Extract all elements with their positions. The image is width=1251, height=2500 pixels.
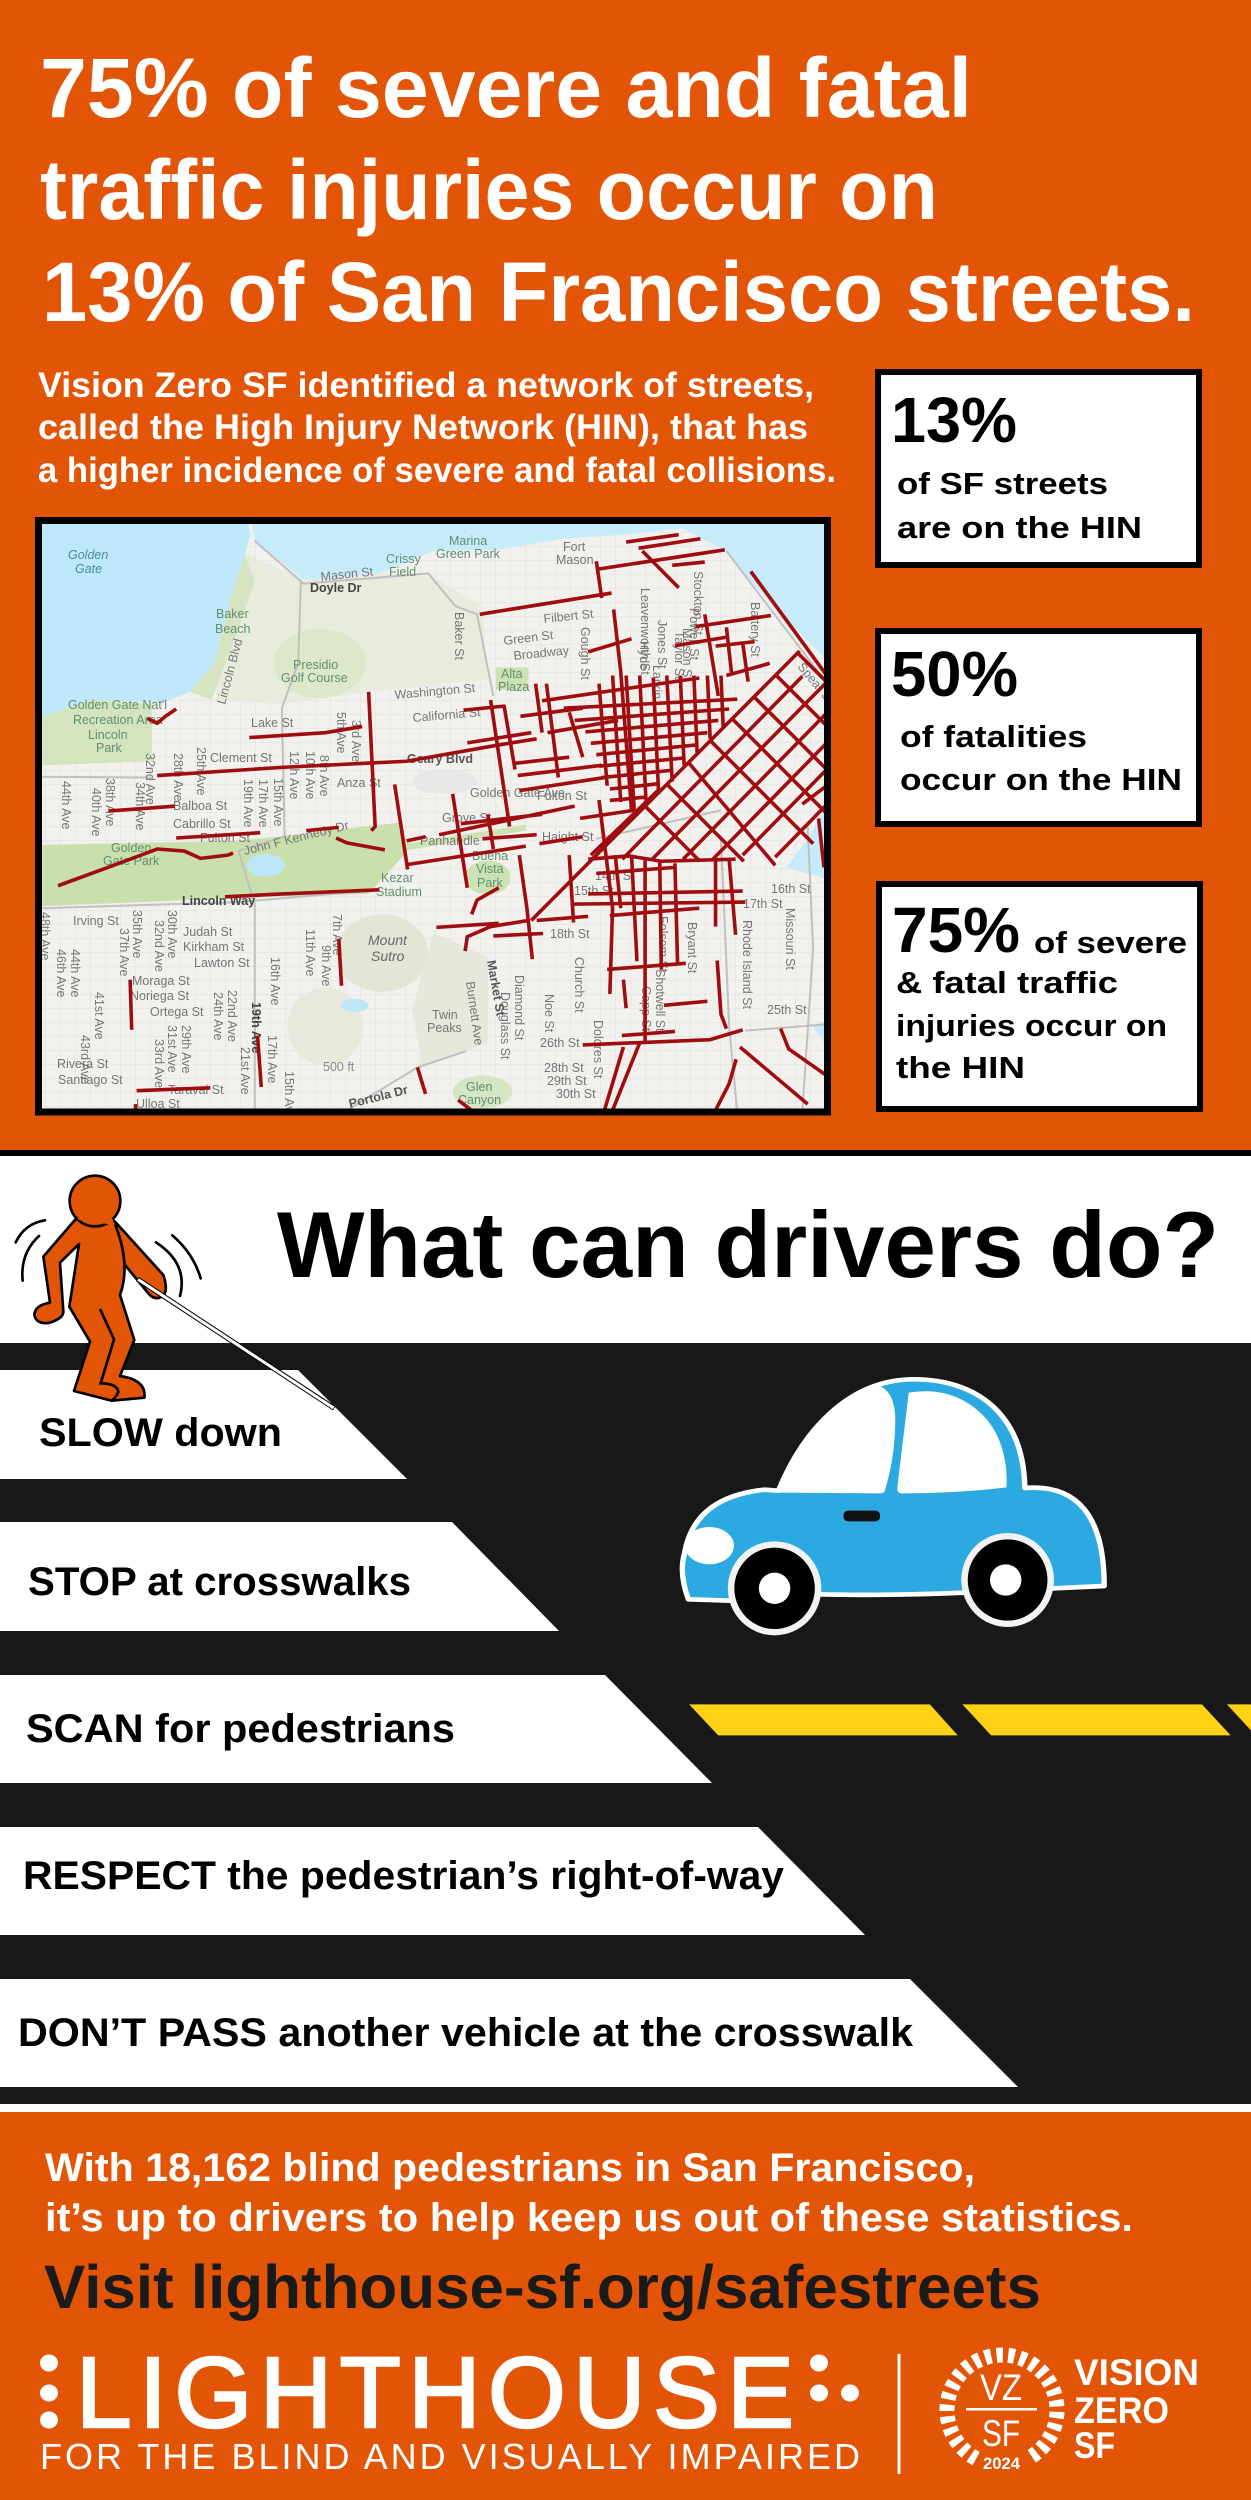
map street labels: 29th Ave	[179, 1025, 193, 1073]
map street labels: Stadium	[376, 885, 422, 899]
stat box: 75%: injuries occur on	[896, 1008, 1167, 1043]
map street labels: 15th Ave	[282, 1071, 296, 1119]
closing statement	[45, 2146, 1133, 2240]
map street labels: Lawton St	[194, 956, 250, 970]
background: orange top panel	[0, 0, 1251, 1150]
logo: Vision Zero SF 2024: VZ	[980, 2367, 1022, 2408]
map street labels: Shotwell St	[653, 969, 667, 1032]
map street labels: Taylor St	[672, 631, 686, 680]
logo: Vision Zero SF 2024	[947, 2352, 1199, 2473]
map street labels: Golden Gate Ave	[470, 786, 565, 800]
map street labels: Fort	[563, 540, 586, 554]
stat box: 75%	[879, 884, 1200, 1109]
map street labels: Green Park	[436, 547, 501, 561]
stat box: 50%: 50%	[891, 638, 1018, 710]
map street labels: Noriega St	[130, 989, 190, 1003]
map street labels: 32nd Ave	[152, 920, 166, 972]
map street labels: Dolores St	[591, 1020, 605, 1079]
map street labels: Judah St	[183, 925, 233, 939]
crosswalk bar: DON'T PASS another vehicle at the crosswalk	[0, 1979, 1018, 2087]
closing statement: it’s up to drivers to help keep us out of these statistics.	[45, 2196, 1133, 2240]
crosswalk bar: SCAN for pedestrians	[0, 1675, 712, 1783]
map street labels: 30th St	[556, 1087, 596, 1101]
logo divider	[898, 2354, 900, 2474]
title: traffic injuries occur on	[40, 143, 938, 237]
map street labels: 48th Ave	[38, 912, 52, 960]
map street labels: 46th Ave	[54, 949, 68, 997]
map street labels	[38, 534, 837, 1119]
map street labels: Golden Gate Nat'l	[68, 698, 167, 712]
title: 75% of severe and fatal	[40, 41, 972, 135]
map street labels: Lincoln Way	[182, 894, 255, 908]
heading: What can drivers do?: What can drivers do?	[277, 1192, 1219, 1297]
map street labels: Sutro	[371, 948, 405, 964]
stat box: 13%: of SF streets	[897, 466, 1108, 501]
map street labels: Gough St	[578, 627, 592, 680]
map street labels: 38th Ave	[103, 778, 117, 826]
map street labels: Lincoln Blvd	[214, 637, 245, 706]
map street labels: Panhandle	[420, 834, 480, 848]
logo: Vision Zero SF 2024: SF	[1074, 2425, 1115, 2466]
map street labels: 28th Ave	[171, 753, 185, 801]
map street labels: Park	[96, 741, 122, 755]
map street labels: 32nd Ave	[143, 753, 157, 805]
map street labels: Field	[389, 565, 416, 579]
intro text: Vision Zero SF identified a network of streets,	[38, 366, 814, 405]
closing statement: With 18,162 blind pedestrians in San Francisco,	[45, 2146, 975, 2190]
footer panel	[0, 2112, 1251, 2500]
map street labels: 17th Ave	[265, 1035, 279, 1083]
road centre line: yellow dashes	[689, 1704, 1251, 1735]
map street labels: Diamond St	[512, 975, 526, 1041]
crosswalk bar: STOP at crosswalks: STOP at crosswalks	[28, 1560, 411, 1604]
map street labels: Geary Blvd	[407, 752, 473, 766]
map street labels: 12th Ave	[287, 751, 301, 799]
map street labels: Gate Park	[103, 854, 160, 868]
map street labels: Plaza	[498, 680, 529, 694]
map street labels: 44th Ave	[68, 949, 82, 997]
map street labels: Church St	[572, 957, 586, 1013]
map street labels: California St	[412, 705, 482, 725]
map street labels: 35th Ave	[130, 910, 144, 958]
map street labels: 3rd Ave	[349, 720, 363, 762]
map street labels: Taraval St	[168, 1083, 224, 1097]
map street labels: 14th St	[595, 869, 635, 883]
map street labels: 9th Ave	[319, 945, 333, 987]
stat box: 75%: 75%	[892, 894, 1020, 966]
stat box: 75%: the HIN	[896, 1050, 1025, 1085]
map street labels: Peaks	[427, 1021, 462, 1035]
map street labels: 37th Ave	[117, 928, 131, 976]
intro text: called the High Injury Network (HIN), that has	[38, 408, 808, 447]
crosswalk bar: SLOW down: SLOW down	[39, 1411, 282, 1455]
map street labels: Clement St	[210, 751, 272, 765]
map street labels: Buena	[472, 849, 508, 863]
map street labels: Gate	[75, 562, 102, 576]
map street labels: Fulton St	[537, 789, 588, 803]
map street labels: 18th St	[550, 927, 590, 941]
map street labels: Kezar	[381, 871, 414, 885]
map street labels: Burnett Ave	[463, 980, 486, 1046]
map street labels: Fulton St	[200, 831, 251, 845]
map street labels: Baker St	[452, 612, 466, 660]
map street labels: Canyon	[458, 1093, 501, 1107]
map street labels: Twin	[432, 1008, 458, 1022]
map street labels: 15th Ave	[271, 778, 285, 826]
map street labels: Beach	[215, 622, 250, 636]
map street labels: 21st Ave	[238, 1047, 252, 1095]
stat box: 50%: of fatalities	[900, 719, 1087, 754]
map street labels: Cabrillo St	[173, 817, 231, 831]
map street labels: Lincoln	[88, 728, 128, 742]
map street labels: 33rd Ave	[152, 1039, 166, 1088]
map street labels: Glen	[466, 1080, 492, 1094]
map street labels: Mason St	[680, 628, 694, 681]
map street labels: Park	[477, 876, 503, 890]
road	[0, 1343, 1251, 2104]
icon: blue car	[682, 1379, 1104, 1635]
map: red high injury street lines	[58, 535, 827, 1110]
map street labels: Grove St	[442, 811, 492, 825]
map street labels: Capp St	[639, 986, 653, 1032]
map street labels: Folsom St	[656, 916, 670, 973]
map street labels: 5th Ave	[334, 712, 348, 754]
map street labels: Marina	[449, 534, 487, 548]
map street labels: Recreation Area	[73, 713, 163, 727]
map street labels: Moraga St	[132, 974, 190, 988]
map street labels: Baker	[216, 607, 249, 621]
map street labels: Irving St	[73, 914, 119, 928]
logo: Vision Zero SF 2024: VISION	[1074, 2352, 1199, 2393]
map street labels: Stockton St	[691, 571, 705, 635]
map street labels: Lake St	[251, 716, 294, 730]
title	[40, 41, 1195, 339]
map street labels: Broadway	[513, 643, 570, 663]
map street labels: Golf Course	[281, 671, 348, 685]
map street labels: Mason St	[320, 564, 374, 584]
call to action link text: Visit lighthouse-sf.org/safestreets	[44, 2253, 1041, 2321]
map street labels: 500 ft	[323, 1060, 355, 1074]
map street labels: 8th Ave	[317, 755, 331, 797]
crosswalk bar: RESPECT the pedestrian's right-of-way	[0, 1827, 865, 1935]
map street labels: Larkin	[650, 665, 664, 699]
map street labels: 16th Ave	[268, 957, 282, 1005]
title: 13% of San Francisco streets.	[42, 245, 1195, 339]
map street labels: Rhode Island St	[740, 920, 754, 1009]
map street labels: 26th St	[540, 1036, 580, 1050]
intro text: a higher incidence of severe and fatal collisions.	[38, 451, 836, 490]
map street labels: 30th Ave	[165, 910, 179, 958]
icon: pedestrian with white cane	[16, 1176, 334, 1408]
map street labels: 19th Ave	[241, 779, 255, 827]
map street labels: 31st Ave	[165, 1025, 179, 1073]
map street labels: 44th Ave	[59, 781, 73, 829]
map street labels: Hyde	[637, 641, 651, 670]
map: High Injury Network	[33, 516, 837, 1119]
map street labels: Santiago St	[58, 1073, 123, 1087]
white strip	[0, 2104, 1251, 2112]
map street labels: John F Kennedy Dr	[242, 818, 350, 858]
map street labels: Market St	[484, 959, 508, 1018]
map street labels: 34th Ave	[133, 782, 147, 830]
map street labels: 16th St	[771, 882, 811, 896]
map street labels: Mount	[368, 932, 408, 948]
map street labels: 43rd Ave	[78, 1035, 92, 1084]
map street labels: 22nd Ave	[225, 990, 239, 1042]
map street labels: Doyle Dr	[310, 581, 362, 595]
white heading band	[0, 1156, 1251, 1343]
map street labels: Ortega St	[150, 1005, 204, 1019]
map street labels: Haight St	[542, 830, 594, 844]
crosswalk bar: SCAN for pedestrians: SCAN for pedestrians	[26, 1707, 455, 1751]
map street labels: Noe St	[542, 994, 556, 1033]
map street labels: 7th Ave	[330, 914, 344, 956]
map street labels: 15th St	[574, 884, 614, 898]
map street labels: Rivera St	[57, 1057, 109, 1071]
logo: Vision Zero SF 2024: ZERO	[1074, 2390, 1169, 2431]
intro text	[38, 366, 836, 490]
logo: LightHouse for the Blind and Visually Impaired: LIGHTHOUSE	[76, 2337, 794, 2449]
map street labels: Golden	[68, 548, 108, 562]
map street labels: Green St	[503, 628, 555, 648]
map street labels: Filbert St	[543, 607, 595, 626]
map street labels: Powell St	[687, 608, 701, 661]
map street labels: 25th Ave	[194, 747, 208, 795]
crosswalk bar: STOP at crosswalks	[0, 1522, 559, 1631]
map street labels: 25th St	[767, 1003, 807, 1017]
map street labels: Missouri St	[783, 908, 797, 970]
logo: LightHouse for the Blind and Visually Impaired: FOR THE BLIND AND VISUALLY IMPAIRED	[40, 2436, 860, 2477]
map street labels: 29th St	[547, 1074, 587, 1088]
map street labels: 28th St	[544, 1061, 584, 1075]
map street labels: Portola Dr	[347, 1083, 409, 1111]
map street labels: Ulloa St	[136, 1097, 180, 1111]
map street labels: Anza St	[337, 776, 381, 790]
map street labels: Presidio	[293, 658, 338, 672]
map street labels: 11th Ave	[303, 929, 317, 977]
map street labels: 19th Ave	[249, 1002, 263, 1053]
map street labels: Jones St	[655, 620, 669, 669]
map street labels: Mason	[556, 553, 594, 567]
map street labels: Leavenworth St	[638, 588, 652, 675]
stat box: 50%	[878, 631, 1199, 824]
map street labels: Alta	[501, 667, 523, 681]
map street labels: 17th Ave	[256, 779, 270, 827]
crosswalk bar: DON'T PASS another vehicle at the crosswalk: DON’T PASS another vehicle at the crosswalk	[18, 2011, 914, 2055]
map street labels: Washington St	[394, 681, 476, 702]
map street labels: 40th Ave	[89, 788, 103, 836]
map street labels: 24th Ave	[211, 992, 225, 1040]
stat box: 50%: occur on the HIN	[900, 762, 1182, 797]
map street labels: 17th St	[743, 897, 783, 911]
stat box: 75%: of severe	[1034, 925, 1187, 960]
map street labels: Golden	[111, 841, 151, 855]
logo: Vision Zero SF 2024: SF	[982, 2413, 1020, 2454]
crosswalk bar: RESPECT the pedestrian's right-of-way: RESPECT the pedestrian’s right-of-way	[23, 1854, 785, 1898]
map street labels: Bryant St	[685, 922, 699, 974]
logo: Vision Zero SF 2024: 2024	[983, 2454, 1021, 2473]
stat box: 13%: 13%	[891, 384, 1017, 456]
map street labels: Vista	[476, 862, 504, 876]
stat box: 13%: are on the HIN	[897, 510, 1142, 545]
map street labels: 41st Ave	[92, 992, 106, 1040]
map street labels: Balboa St	[173, 799, 228, 813]
crosswalk bar: SLOW down	[0, 1370, 407, 1479]
stat box: 13%	[878, 372, 1199, 565]
map street labels: Battery St	[748, 602, 762, 657]
map street labels: 10th Ave	[303, 751, 317, 799]
divider band	[0, 1150, 1251, 1156]
map street labels: Crissy	[386, 552, 421, 566]
stat box: 75%: & fatal traffic	[896, 965, 1118, 1000]
map street labels: Spear St	[795, 660, 837, 707]
map street labels: Kirkham St	[183, 940, 245, 954]
map street labels: Douglass St	[498, 992, 512, 1060]
